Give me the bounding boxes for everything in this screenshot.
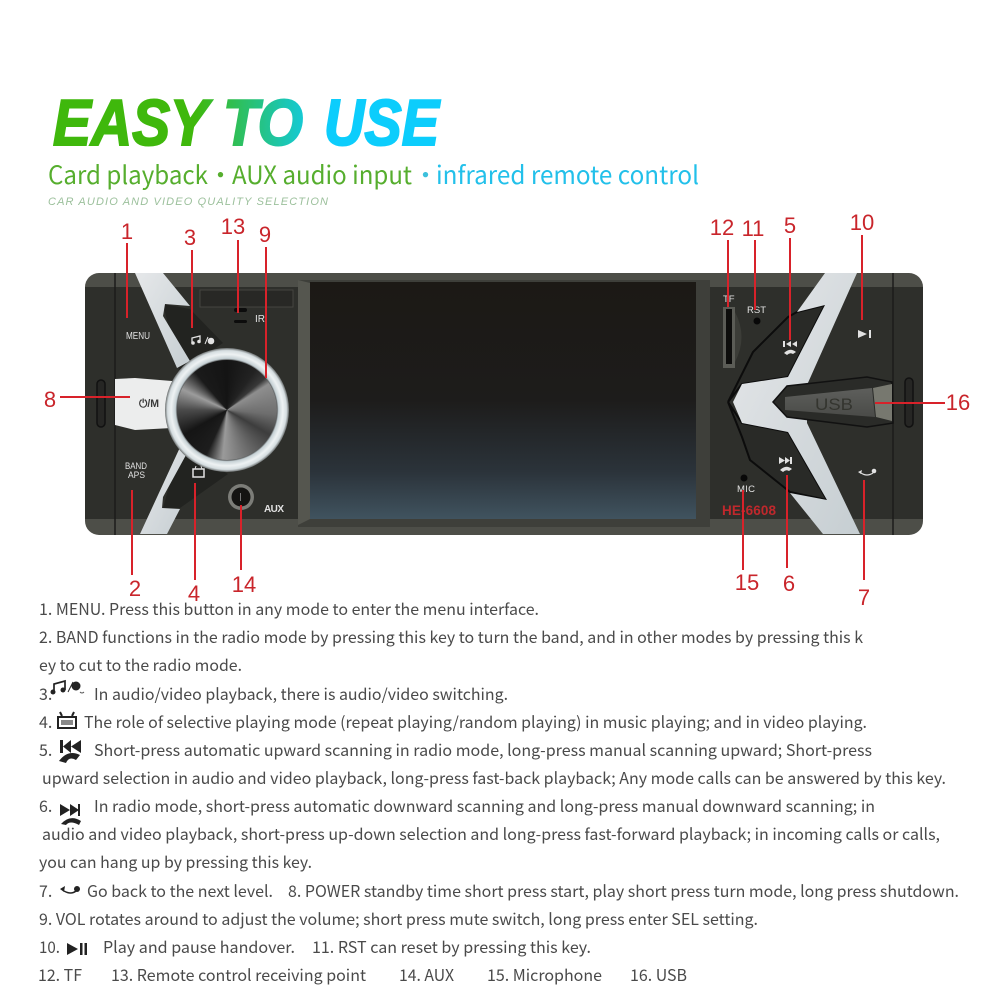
button labels	[125, 294, 776, 518]
instructions text: 8. POWER standby time short press start, play short press turn mode, long press shutdown.	[288, 878, 959, 902]
instructions text: 7.	[39, 878, 52, 902]
instructions text: 6.	[39, 793, 52, 817]
title: EASY	[53, 86, 213, 159]
icon: return	[60, 886, 80, 893]
button labels: RST	[747, 305, 766, 316]
instructions text: upward selection in audio and video playback, long-press fast-back playback; Any mode calls can be answered by this key.	[42, 765, 946, 789]
instructions text: ey to cut to the radio mode.	[39, 652, 242, 676]
instructions text: audio and video playback, short-press up-down selection and long-press fast-forward playback; in incoming calls or calls,	[42, 821, 940, 845]
callout numbers: 4	[188, 581, 200, 606]
callout numbers: 5	[784, 213, 796, 238]
device icons	[191, 330, 876, 477]
subtitle: ·	[208, 156, 233, 192]
car stereo device body	[85, 273, 923, 535]
USB port: USB	[815, 395, 853, 414]
instructions text: Go back to the next level.	[87, 878, 273, 902]
instructions text	[38, 596, 959, 986]
icon: play pause	[67, 943, 87, 955]
subtitle	[48, 156, 699, 192]
callout numbers: 13	[221, 214, 245, 239]
button labels: AUX	[264, 504, 284, 515]
TF slot	[723, 307, 742, 368]
button labels: ⏻/M	[139, 397, 159, 410]
title: USE	[324, 86, 440, 159]
instructions text: 10.	[39, 934, 60, 958]
subtitle: ·	[413, 156, 438, 192]
instructions text: The role of selective playing mode (repeat playing/random playing) in music playing; and in video playing.	[84, 709, 867, 733]
callout numbers	[44, 210, 970, 610]
button labels: MIC	[737, 484, 755, 495]
subtitle: infrared remote control	[436, 156, 699, 192]
button labels: TF	[723, 294, 735, 305]
instructions text: 9. VOL rotates around to adjust the volume; short press mute switch, long press enter SEL setting.	[39, 906, 758, 930]
instructions text: 11. RST can reset by pressing this key.	[312, 934, 591, 958]
title	[53, 86, 440, 159]
callout numbers: 15	[735, 570, 759, 595]
callout numbers: 10	[850, 210, 874, 235]
callout numbers: 16	[946, 390, 970, 415]
red callout lines	[60, 235, 945, 580]
callout numbers: 1	[121, 219, 133, 244]
callout numbers: 7	[858, 585, 870, 610]
instructions text: 2. BAND functions in the radio mode by pressing this key to turn the band, and in other modes by pressing this k	[39, 624, 863, 648]
instructions text: 16. USB	[630, 962, 687, 986]
callout numbers: 14	[232, 572, 256, 597]
left white trim	[135, 273, 190, 534]
instructions text: 13. Remote control receiving point	[111, 962, 366, 986]
instructions text: 5.	[39, 737, 52, 761]
subtitle: Card playback	[48, 156, 208, 192]
callout numbers: 11	[742, 216, 764, 241]
callout numbers: 12	[710, 215, 734, 240]
instructions text: In radio mode, short-press automatic downward scanning and long-press manual downward scanning; in	[94, 793, 875, 817]
instructions text: 15. Microphone	[487, 962, 602, 986]
right white star trim	[733, 273, 860, 534]
instructions text: Short-press automatic upward scanning in radio mode, long-press manual scanning upward; Short-press	[94, 737, 872, 761]
USB port	[773, 377, 893, 427]
instructions text: 1. MENU. Press this button in any mode to enter the menu interface.	[39, 596, 539, 620]
instructions text: 12. TF	[38, 962, 82, 986]
instructions text: In audio/video playback, there is audio/video switching.	[94, 681, 508, 705]
button labels: HE-6608	[722, 503, 776, 518]
icon: tv	[58, 712, 76, 728]
volume knob	[165, 348, 289, 472]
instructions text: you can hang up by pressing this key.	[39, 849, 312, 873]
tagline: CAR AUDIO AND VIDEO QUALITY SELECTION	[48, 196, 328, 208]
screen	[298, 280, 710, 527]
subtitle: AUX audio input	[232, 156, 413, 192]
callout numbers: 3	[184, 225, 196, 250]
icon: next with phone	[60, 804, 81, 825]
callout numbers: 8	[44, 387, 56, 412]
IR window: IR	[255, 314, 265, 325]
callout numbers: 2	[129, 576, 141, 601]
power button	[115, 378, 172, 430]
instructions text: 4.	[39, 709, 52, 733]
title: TO	[223, 86, 303, 159]
button labels: BAND	[125, 461, 147, 472]
instructions text: 14. AUX	[399, 962, 454, 986]
AUX jack	[228, 484, 254, 510]
icon: music and disc	[50, 681, 84, 694]
callout numbers: 6	[783, 571, 795, 596]
IR window	[200, 290, 293, 325]
button labels: MENU	[126, 331, 150, 342]
instructions text: 3.	[39, 681, 52, 705]
RST and MIC holes	[740, 318, 760, 482]
callout numbers: 9	[259, 222, 271, 247]
instructions text: Play and pause handover.	[103, 934, 295, 958]
icon: previous with phone	[59, 740, 81, 763]
button labels: APS	[128, 470, 145, 481]
